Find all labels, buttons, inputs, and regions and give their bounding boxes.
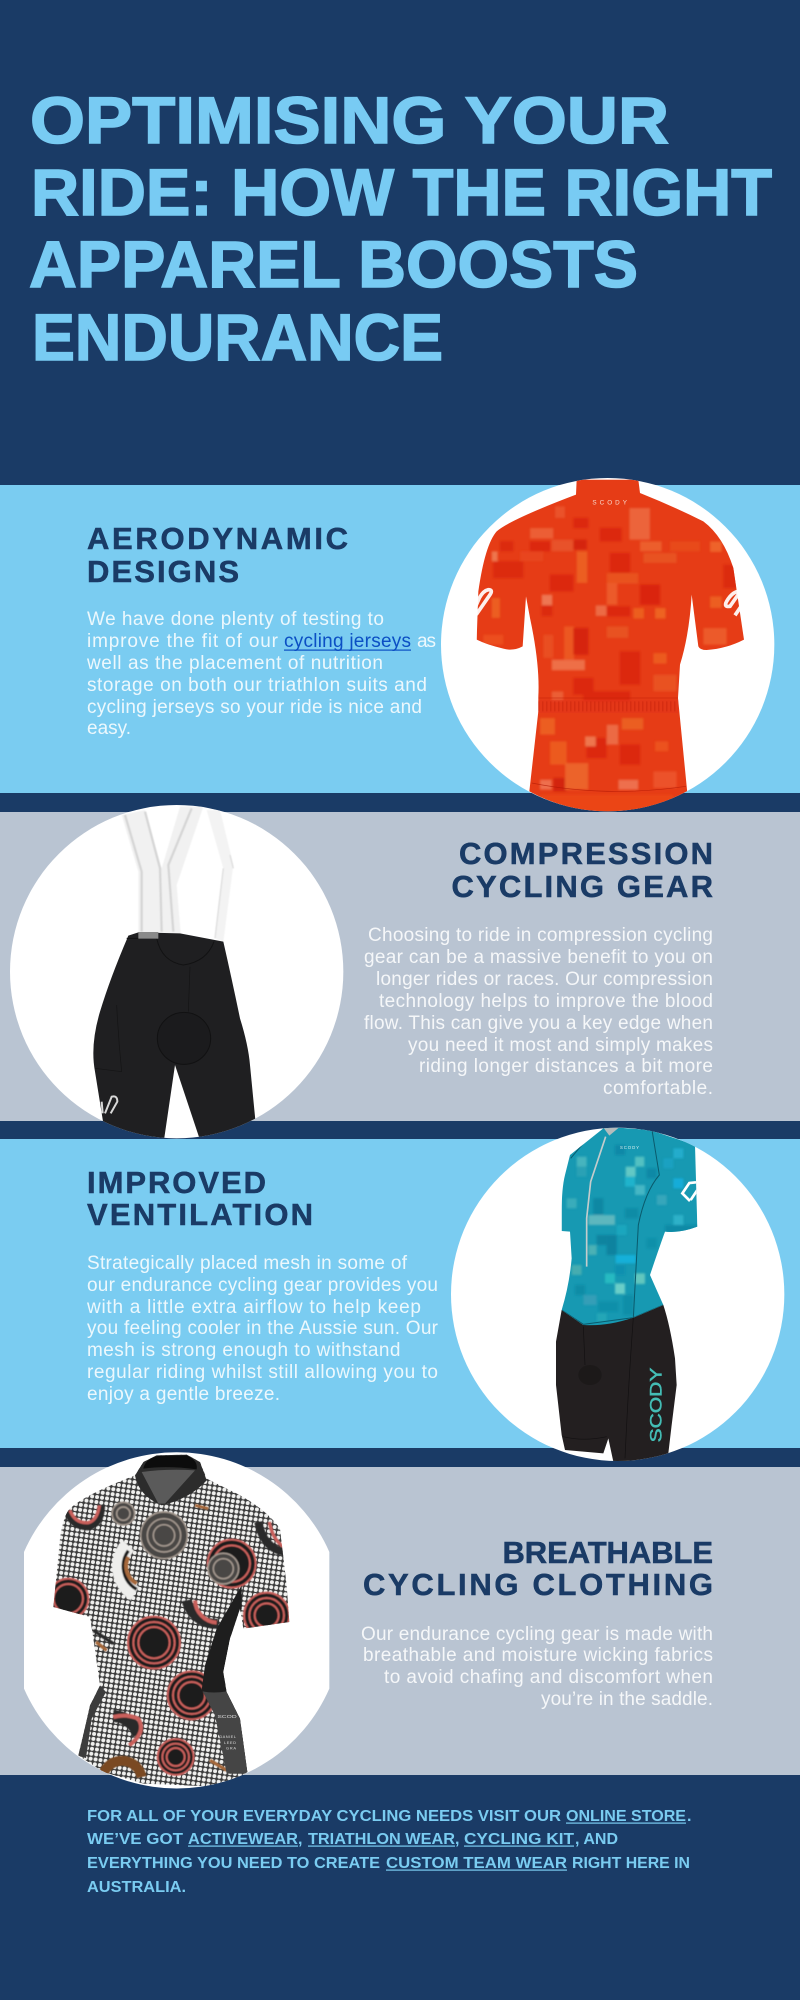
callout: footer text with links: ,: [455, 1831, 459, 1848]
panel: breathable cycling clothing: [0, 1467, 800, 1775]
image: patterned dot jersey in clipped white circle: [24, 1452, 329, 1789]
text block: compression body: comfortable.: [603, 1078, 713, 1099]
image: patterned dot jersey in clipped white circle: DANIEL: [219, 1734, 237, 1739]
text block: aerodynamic body: storage on both our triathlon suits and: [87, 675, 427, 696]
text block: compression body: longer rides or races. Our compression: [376, 969, 713, 990]
bib straps: [122, 807, 233, 942]
text block: compression body: riding longer distances a bit more: [419, 1056, 713, 1077]
collar: [135, 1454, 207, 1505]
panel background: grey band: [0, 812, 800, 1121]
heading: compression cycling gear: [452, 836, 713, 904]
text block: ventilation body: our endurance cycling gear provides you: [87, 1275, 438, 1296]
heading: aerodynamic designs: [87, 521, 348, 589]
text block: compression body: gear can be a massive benefit to you on: [364, 947, 713, 968]
arc motifs: [67, 1505, 285, 1777]
heading: improved ventilation: IMPROVED: [87, 1165, 266, 1200]
heading: aerodynamic designs: DESIGNS: [87, 554, 239, 589]
image: patterned dot jersey in clipped white circle: LEED: [224, 1740, 236, 1745]
callout: footer text with links: TRIATHLON WEAR: [308, 1831, 455, 1848]
text block: aerodynamic body: We have done plenty of testing to: [87, 609, 384, 630]
callout: footer text with links: WE’VE GOT: [87, 1831, 183, 1848]
callout: footer text with links: [87, 1808, 691, 1896]
callout: footer text with links: ONLINE STORE: [566, 1808, 686, 1825]
text block: ventilation body: mesh is strong enough to withstand: [87, 1340, 400, 1361]
logo text: vertical SCODY: SCODY: [646, 1368, 665, 1442]
text block: aerodynamic body: cycling jerseys: [284, 631, 411, 652]
text block: compression body: [364, 925, 713, 1099]
title: ENDURANCE: [32, 300, 443, 374]
text block: aerodynamic body: well as the placement of nutrition: [86, 653, 383, 674]
text block: aerodynamic body: cycling jerseys so your ride is nice and: [87, 697, 422, 718]
callout: footer text with links: CUSTOM TEAM WEAR: [386, 1855, 567, 1872]
text block: aerodynamic body: easy.: [87, 718, 131, 739]
icon: left sleeve logo: [475, 590, 491, 614]
title: RIDE: HOW THE RIGHT: [31, 155, 772, 229]
concentric ring motifs: [48, 1540, 289, 1775]
callout: footer text with links: FOR ALL OF YOUR EVERYDAY CYCLING NEEDS VISIT OUR: [87, 1808, 561, 1825]
callout: footer text with links: .: [687, 1808, 691, 1825]
heading: compression cycling gear: COMPRESSION: [459, 836, 713, 871]
text block: breathable body: [361, 1624, 713, 1710]
heading: breathable cycling clothing: CYCLING CLOTHING: [363, 1567, 713, 1602]
suit shorts: [556, 1305, 677, 1462]
side panel dark: [202, 1585, 248, 1774]
callout: footer text with links: , AND: [575, 1831, 618, 1848]
text block: compression body: technology helps to improve the blood: [379, 991, 713, 1012]
heading: breathable cycling clothing: BREATHABLE: [502, 1535, 713, 1570]
text block: compression body: Choosing to ride in compression cycling: [368, 925, 713, 946]
seams: [562, 1130, 663, 1324]
heading: breathable cycling clothing: [363, 1535, 713, 1602]
callout: footer text with links: RIGHT HERE IN: [572, 1855, 690, 1872]
text block: ventilation body: enjoy a gentle breeze.: [87, 1384, 280, 1405]
zipper: [587, 1137, 606, 1267]
suit top mosaic: [560, 1125, 700, 1328]
panel background: grey band: [0, 1467, 800, 1775]
heading: improved ventilation: VENTILATION: [87, 1197, 313, 1232]
shorts: [93, 932, 255, 1140]
text block: breathable body: you’re in the saddle.: [541, 1689, 713, 1710]
image: orange cycling jersey in white circle: [441, 478, 774, 815]
text block: ventilation body: you feeling cooler in the Aussie sun. Our: [87, 1318, 439, 1339]
logo text: SCODY: SCODY: [592, 500, 628, 507]
text block: aerodynamic body: as: [417, 631, 436, 652]
callout: footer text with links: ,: [298, 1831, 302, 1848]
callout: footer text with links: AUSTRALIA.: [87, 1879, 186, 1896]
panel: aerodynamic designs: [0, 485, 800, 793]
callout: footer text with links: ACTIVEWEAR: [188, 1831, 298, 1848]
text block: ventilation body: Strategically placed mesh in some of: [87, 1253, 408, 1274]
panel background: light blue band: [0, 485, 800, 793]
title: APPAREL BOOSTS: [29, 227, 638, 301]
image: teal triathlon suit in white circle: [451, 1125, 784, 1462]
side print text: SCOD: [217, 1714, 238, 1719]
text block: ventilation body: regular riding whilst still allowing you to: [87, 1362, 438, 1383]
sleeve logo: [682, 1182, 697, 1201]
text block: ventilation body: with a little extra airflow to help keep: [86, 1297, 421, 1318]
panel: compression cycling gear: [0, 812, 800, 1121]
heading: improved ventilation: [87, 1165, 313, 1232]
text block: compression body: flow. This can give you a key edge when: [364, 1013, 713, 1034]
image: black bib shorts in white circle: [10, 805, 343, 1140]
waistband: [538, 700, 678, 713]
image: patterned dot jersey in clipped white circle: GRA: [226, 1745, 236, 1750]
text block: breathable body: breathable and moisture wicking fabrics: [363, 1645, 713, 1666]
icon: shorts logo: [102, 1096, 117, 1113]
title: [29, 83, 772, 374]
callout: footer text with links: CYCLING KIT: [464, 1831, 574, 1848]
text block: breathable body: Our endurance cycling gear is made with: [361, 1624, 713, 1645]
panel: improved ventilation: [0, 1139, 800, 1448]
text block: breathable body: to avoid chafing and discomfort when: [384, 1667, 713, 1688]
text block: ventilation body: [86, 1253, 439, 1405]
icon: right sleeve logo: [726, 591, 744, 615]
heading: aerodynamic designs: AERODYNAMIC: [87, 521, 348, 556]
logo text: chest SCODY: SCODY: [620, 1145, 639, 1150]
text block: aerodynamic body: improve the fit of our: [87, 631, 279, 652]
callout: footer text with links: EVERYTHING YOU NEED TO CREATE: [87, 1855, 380, 1872]
neck: [604, 1128, 618, 1136]
text block: aerodynamic body: [86, 609, 436, 739]
heading: compression cycling gear: CYCLING GEAR: [452, 869, 713, 904]
title: OPTIMISING YOUR: [30, 83, 669, 157]
text block: compression body: you need it most and simply makes: [408, 1035, 713, 1056]
panel background: light blue band: [0, 1139, 800, 1448]
